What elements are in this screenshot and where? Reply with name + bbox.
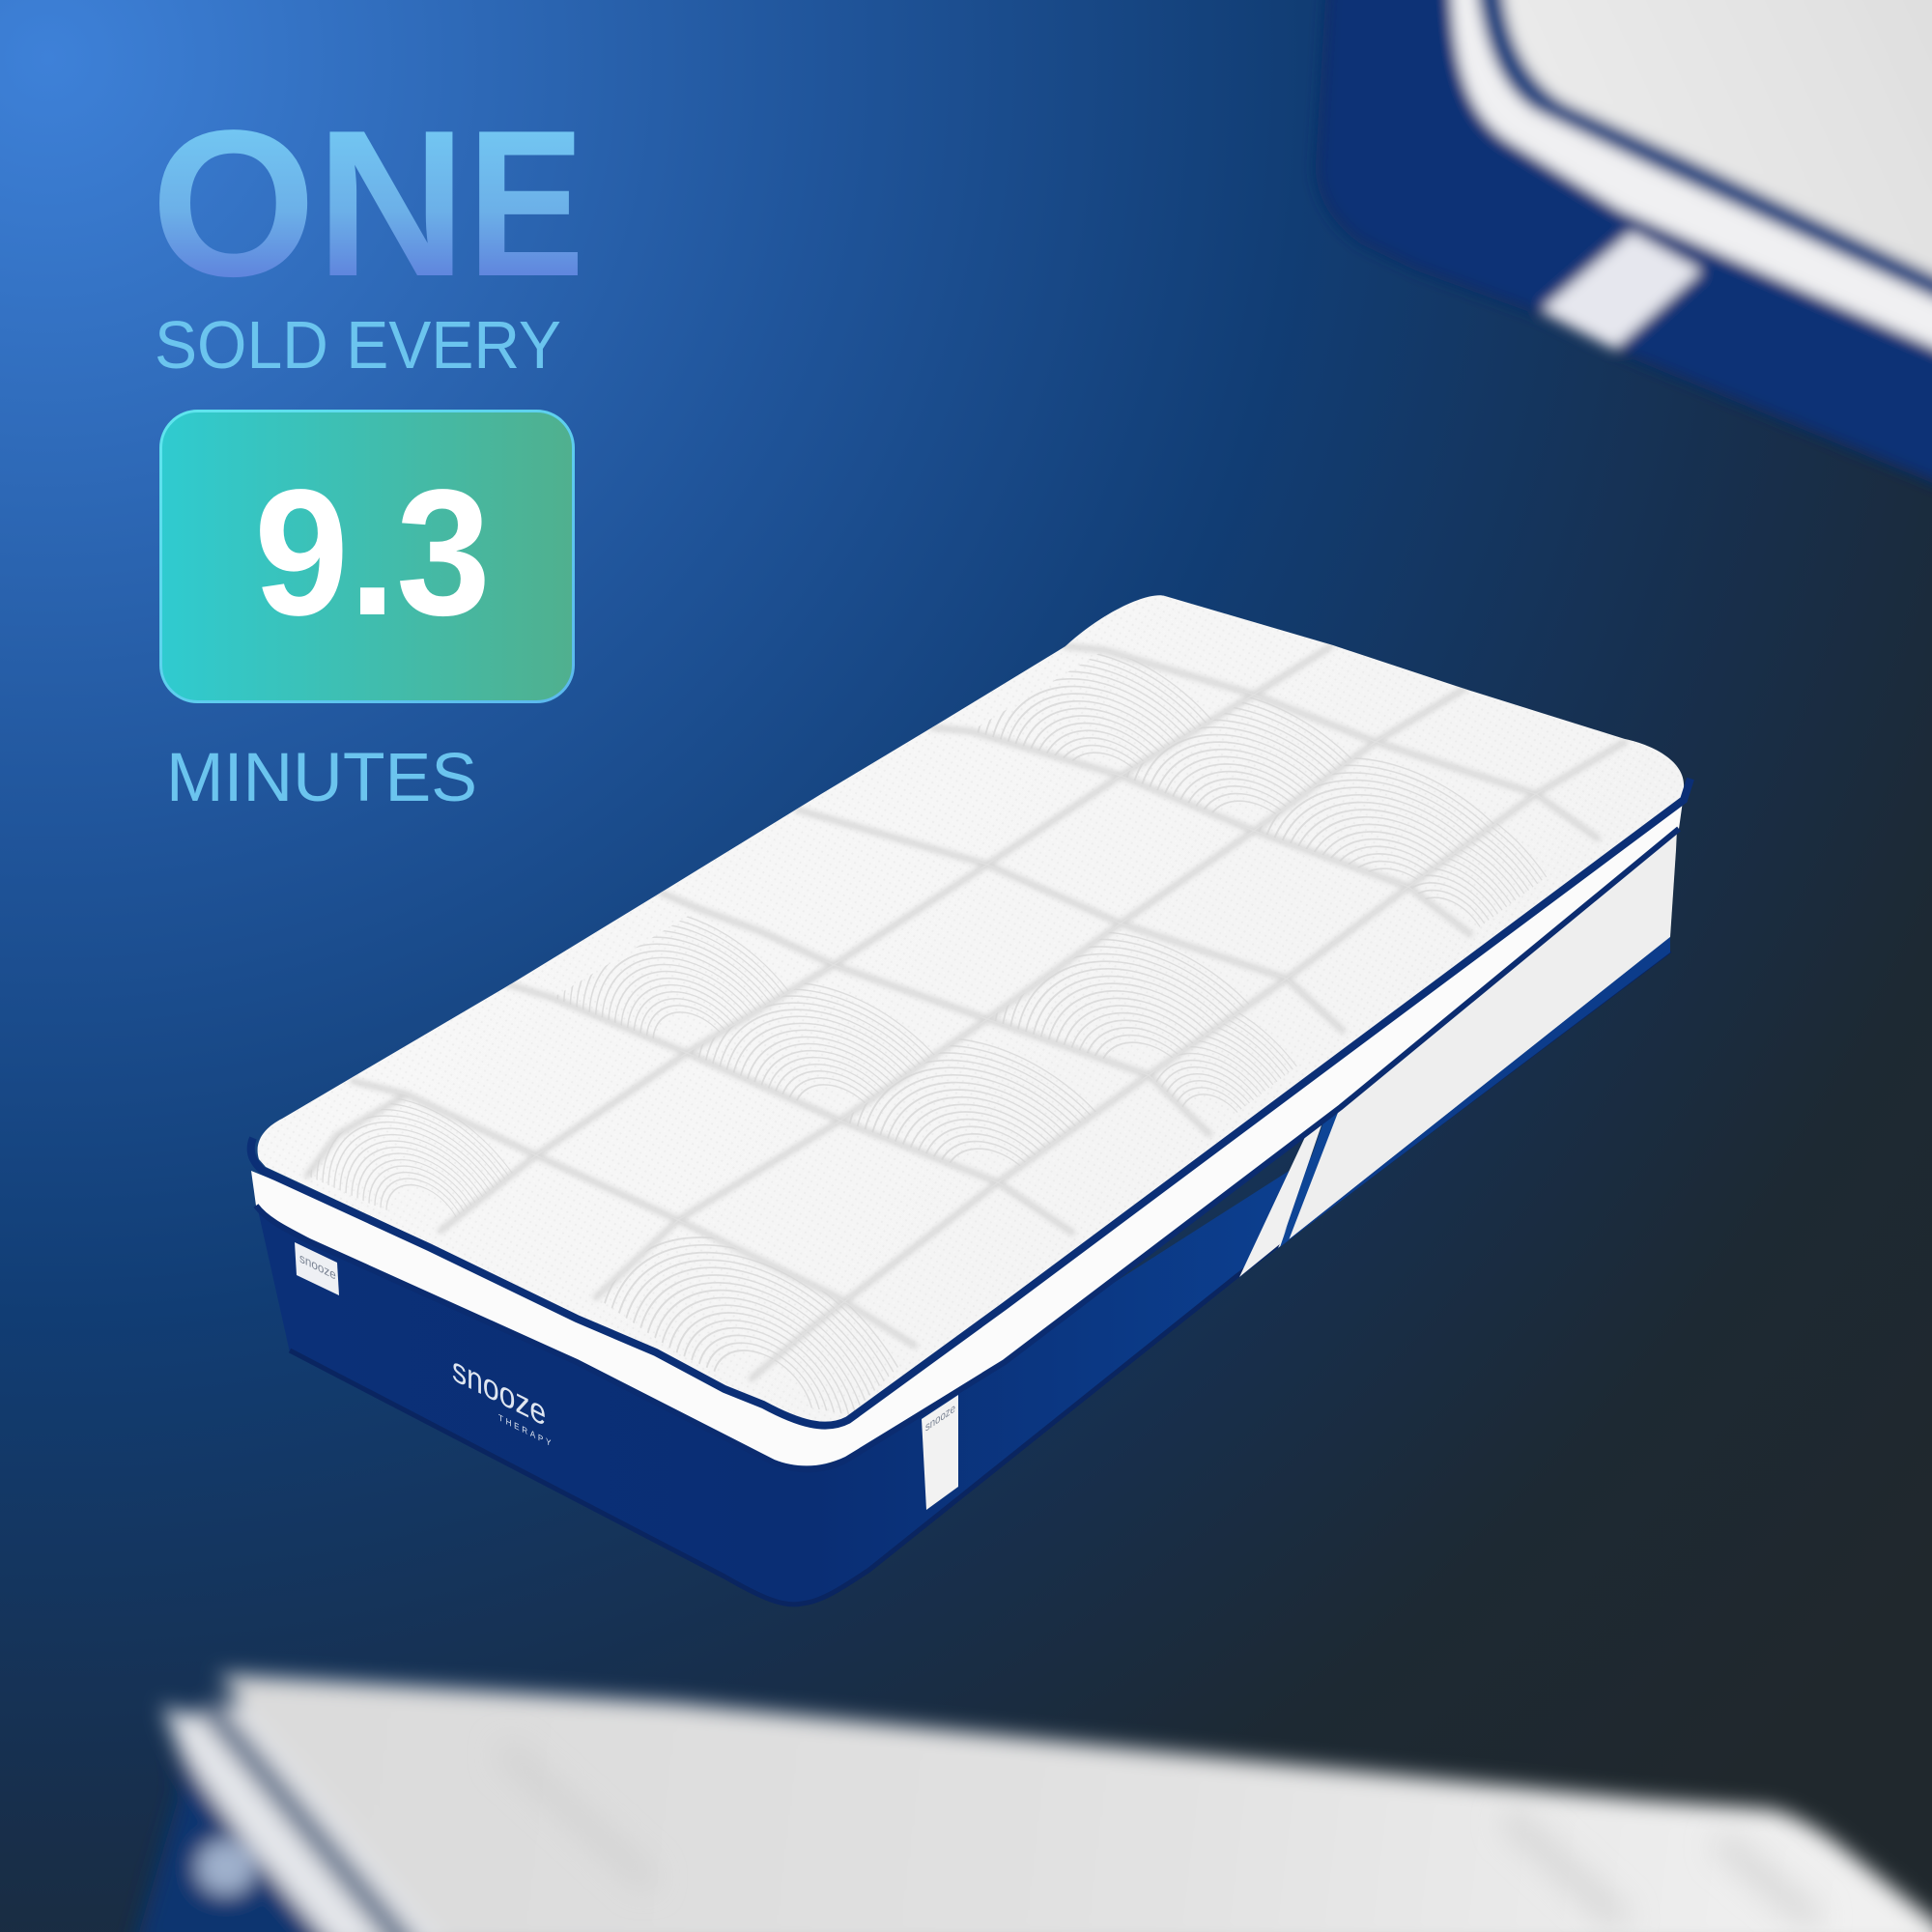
white upper band <box>251 794 1684 1465</box>
mattress <box>251 595 1690 1605</box>
headline: ONE: O <box>151 87 316 321</box>
tag text: snooze <box>925 1400 955 1435</box>
blurred mattress: bottom foreground <box>133 1674 1932 1932</box>
quilted ridges <box>299 598 1625 1463</box>
stat value: 9.3 <box>254 453 491 653</box>
mattress bottom piping <box>290 951 1670 1605</box>
label: SOLD EVERY: SOLD EVERY <box>155 307 561 383</box>
brand sub-line: THERAPY <box>498 1412 554 1450</box>
top piping <box>251 779 1690 1426</box>
brand logo: snooze <box>452 1348 546 1435</box>
white side panel <box>1278 829 1677 1248</box>
lower blue trim <box>1237 937 1670 1279</box>
knit texture <box>258 595 1684 1422</box>
tag: left small label <box>295 1242 339 1295</box>
white slanted stripe <box>1239 1117 1324 1277</box>
blurred mattress: top right corner <box>1319 0 1932 488</box>
top surface <box>258 595 1684 1422</box>
lower piping <box>256 829 1679 1469</box>
headline: ONE: N <box>316 86 467 320</box>
headline: ONE: E <box>468 87 584 321</box>
mattress navy base: front and long side <box>253 927 1670 1605</box>
stat box: 9.3 <box>160 412 574 701</box>
curved stitch panels <box>299 598 1587 1463</box>
seams: crisp line <box>408 645 1492 1360</box>
headline: ONE <box>151 86 584 321</box>
blue slanted stripe <box>1280 1105 1341 1247</box>
tag text: snooze <box>299 1250 336 1283</box>
tag: corner long label <box>922 1395 958 1510</box>
label: MINUTES: MINUTES <box>166 740 477 816</box>
blurred mattress: soft seams <box>503 1748 1816 1922</box>
seams: soft shadow <box>307 646 1625 1378</box>
